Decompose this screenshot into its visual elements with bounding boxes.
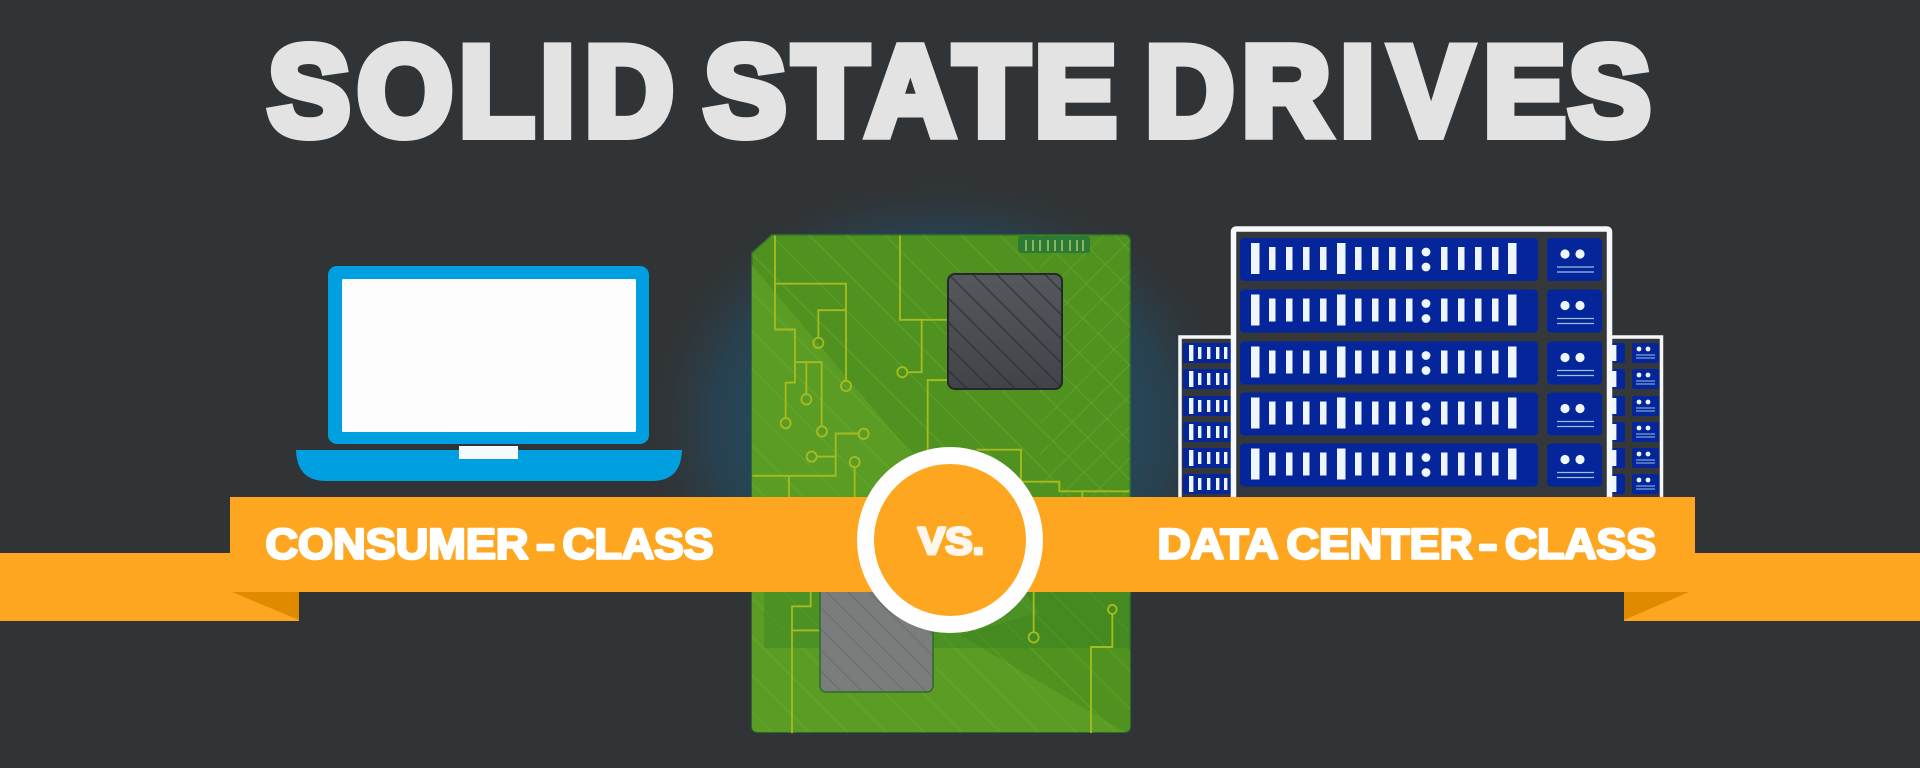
label: data center-class: -: [1478, 522, 1498, 568]
gray chip: [820, 585, 933, 692]
title: STATE: [704, 21, 1117, 162]
icon: laptop: [296, 266, 682, 481]
label: data center-class: DATA: [1158, 522, 1278, 568]
connector: [1018, 236, 1090, 253]
label: consumer-class: [266, 522, 714, 568]
icon: main server rack: [1234, 229, 1610, 505]
board base: [752, 235, 1130, 732]
left ribbon tail: [0, 553, 299, 621]
label: consumer-class: CLASS: [562, 522, 714, 568]
laptop screen: [342, 279, 636, 432]
icon: rear server rack right: [1600, 335, 1663, 505]
title: DRIVES: [1145, 21, 1651, 162]
label: consumer-class: -: [536, 522, 555, 568]
right ribbon fold: [1624, 592, 1689, 620]
circuit traces: [752, 235, 1129, 733]
title: [268, 21, 1651, 162]
blue glow behind circuit board: [646, 180, 1236, 670]
right ribbon tail: [1624, 553, 1920, 621]
title: SOLID: [268, 21, 673, 162]
orange main ribbon: [230, 497, 1695, 592]
left ribbon fold: [232, 592, 299, 620]
label: consumer-class: CONSUMER: [266, 522, 528, 568]
laptop lid: [328, 266, 649, 444]
laptop base: [296, 450, 682, 481]
vs. badge: [866, 456, 1034, 624]
circuit board: [752, 235, 1130, 735]
label: data center-class: CENTER: [1286, 522, 1472, 568]
vs. badge: VS.: [918, 521, 984, 563]
laptop notch: [459, 446, 518, 459]
dark chip: [948, 274, 1062, 389]
label: data center-class: [1158, 522, 1656, 568]
label: data center-class: CLASS: [1505, 522, 1656, 568]
icon: rear server rack left: [1178, 335, 1243, 505]
